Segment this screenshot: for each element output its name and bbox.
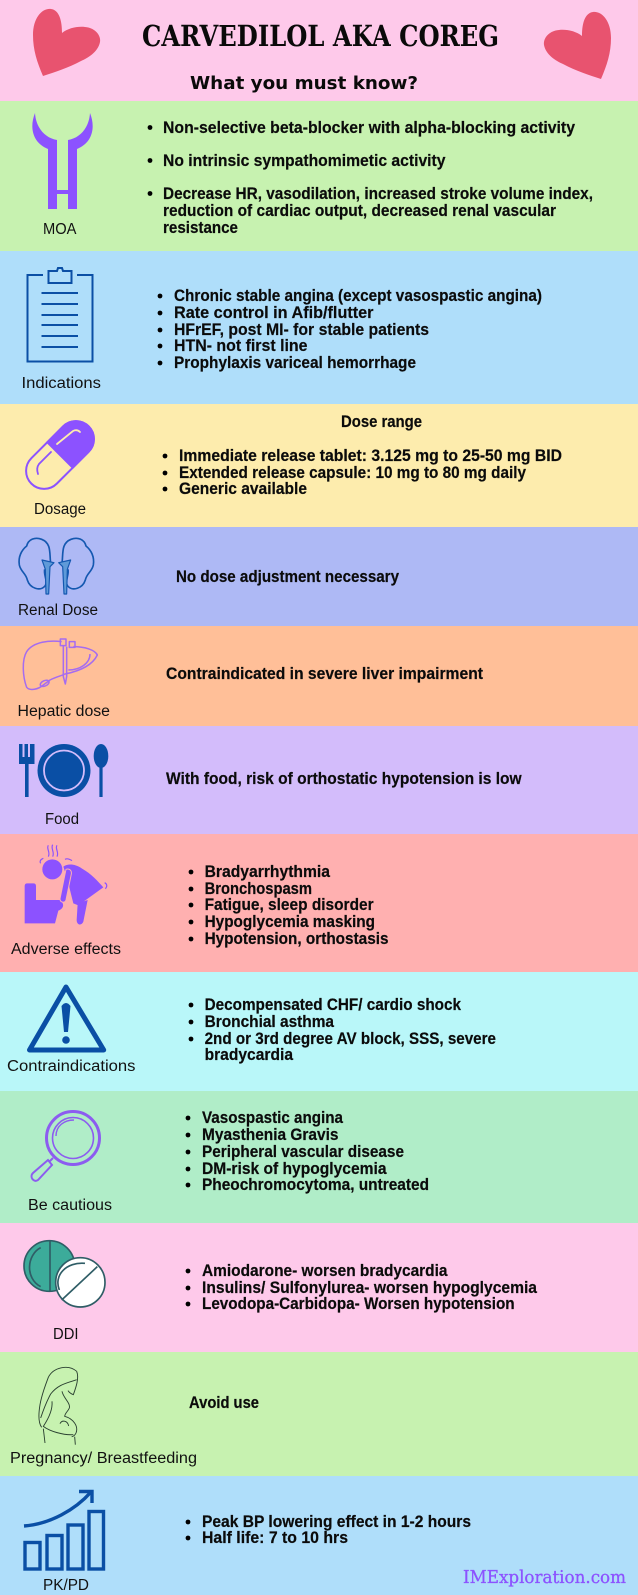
label: Indications: Indications bbox=[22, 375, 101, 392]
icon: pills bbox=[24, 1240, 105, 1307]
panel: renal dose background bbox=[0, 527, 638, 626]
subtitle: What you must know? bbox=[190, 73, 418, 94]
list: indications: HFrEF, post MI- for stable patients bbox=[174, 320, 429, 339]
label: Hepatic dose: Hepatic dose bbox=[18, 703, 110, 720]
list: mechanism of action bbox=[148, 118, 593, 237]
icon: warning triangle bbox=[30, 987, 104, 1050]
panel: dosage background bbox=[0, 404, 638, 527]
label: Dosage: Dosage bbox=[34, 501, 86, 518]
icon: liver bbox=[23, 639, 97, 689]
title: CARVEDILOL AKA COREG bbox=[142, 19, 499, 53]
list: mechanism of action: Decrease HR, vasodilation, increased stroke volume index, bbox=[163, 184, 593, 203]
list: pharmacokinetics bbox=[186, 1512, 471, 1547]
panel: hepatic dose background bbox=[0, 626, 638, 726]
panel: pregnancy background bbox=[0, 1352, 638, 1476]
icon: receptor bbox=[32, 113, 93, 209]
panel: contraindications background bbox=[0, 972, 638, 1091]
website credit: IMExploration.com bbox=[463, 1567, 626, 1588]
list: mechanism of action: resistance bbox=[163, 218, 238, 237]
label: Adverse effects: Adverse effects bbox=[11, 941, 121, 958]
text: pregnancy: Avoid use bbox=[189, 1393, 259, 1412]
icon: plate and cutlery bbox=[19, 744, 108, 797]
list: drug interactions bbox=[186, 1261, 537, 1313]
list: dose range bbox=[163, 446, 562, 498]
label: Pregnancy/ Breastfeeding: Pregnancy/ Breastfeeding bbox=[10, 1450, 197, 1467]
list: contraindications bbox=[189, 995, 496, 1064]
label: Renal Dose: Renal Dose bbox=[18, 602, 98, 619]
list: indications: Prophylaxis variceal hemorrhage bbox=[174, 353, 416, 372]
list: mechanism of action: No intrinsic sympathomimetic activity bbox=[163, 151, 446, 170]
label: Food: Food bbox=[45, 811, 79, 828]
list: adverse effects: Hypotension, orthostasis bbox=[205, 929, 388, 948]
list: adverse effects: Bradyarrhythmia bbox=[205, 862, 330, 881]
panel: header background bbox=[0, 0, 638, 101]
label: PK/PD: PK/PD bbox=[43, 1577, 89, 1594]
panel: food background bbox=[0, 726, 638, 834]
list: be cautious: Vasospastic angina bbox=[202, 1108, 343, 1127]
list: contraindications: Bronchial asthma bbox=[205, 1012, 334, 1031]
panel: be cautious background bbox=[0, 1091, 638, 1223]
list: contraindications: bradycardia bbox=[205, 1045, 293, 1064]
list: pharmacokinetics: Half life: 7 to 10 hrs bbox=[202, 1528, 348, 1547]
panel: indications background bbox=[0, 251, 638, 404]
list: contraindications: Decompensated CHF/ cardio shock bbox=[205, 995, 461, 1014]
panel: PK/PD background bbox=[0, 1476, 638, 1595]
panel: DDI background bbox=[0, 1223, 638, 1352]
list: drug interactions: Amiodarone- worsen bradycardia bbox=[202, 1261, 448, 1280]
text: renal dose: No dose adjustment necessary bbox=[176, 567, 399, 586]
list: drug interactions: Levodopa-Carbidopa- Worsen hypotension bbox=[202, 1294, 515, 1313]
list: dose range: Extended release capsule: 10 mg to 80 mg daily bbox=[179, 463, 526, 482]
icon: capsule bbox=[19, 414, 101, 496]
label: DDI: DDI bbox=[53, 1326, 78, 1343]
icon: kidneys bbox=[19, 538, 94, 594]
text: hepatic dose: Contraindicated in severe liver impairment bbox=[166, 664, 483, 683]
heading: dose range: Dose range bbox=[341, 412, 422, 431]
list: be cautious: Peripheral vascular disease bbox=[202, 1142, 404, 1161]
list: pharmacokinetics: Peak BP lowering effect in 1-2 hours bbox=[202, 1512, 471, 1531]
icon: pregnant woman bbox=[39, 1367, 78, 1445]
text: food: With food, risk of orthostatic hypotension is low bbox=[166, 769, 522, 788]
list: indications: Rate control in Afib/flutter bbox=[174, 303, 374, 322]
label: Be cautious: Be cautious bbox=[28, 1197, 112, 1214]
list: adverse effects: Fatigue, sleep disorder bbox=[205, 895, 374, 914]
list: adverse effects: Hypoglycemia masking bbox=[205, 912, 375, 931]
list: dose range: Generic available bbox=[179, 479, 307, 498]
list: be cautious: Myasthenia Gravis bbox=[202, 1125, 338, 1144]
icon: person vomiting bbox=[25, 845, 107, 925]
list: contraindications: 2nd or 3rd degree AV block, SSS, severe bbox=[205, 1029, 496, 1048]
list: indications: Chronic stable angina (except vasospastic angina) bbox=[174, 286, 542, 305]
list: be cautious bbox=[186, 1108, 429, 1194]
list: adverse effects: Bronchospasm bbox=[205, 879, 312, 898]
label: Contraindications: Contraindications bbox=[7, 1058, 136, 1075]
list: indications bbox=[158, 286, 542, 372]
list: be cautious: DM-risk of hypoglycemia bbox=[202, 1159, 387, 1178]
list: adverse effects bbox=[189, 862, 388, 948]
icon: magnifying glass bbox=[32, 1112, 100, 1181]
list: mechanism of action: Non-selective beta-blocker with alpha-blocking activity bbox=[163, 118, 575, 137]
panel: adverse effects background bbox=[0, 834, 638, 972]
list: indications: HTN- not first line bbox=[174, 336, 308, 355]
list: mechanism of action: reduction of cardiac output, decreased renal vascular bbox=[163, 201, 556, 220]
list: drug interactions: Insulins/ Sulfonylurea- worsen hypoglycemia bbox=[202, 1278, 537, 1297]
icon: right heart bbox=[544, 12, 611, 79]
panel: MOA background bbox=[0, 101, 638, 251]
list: be cautious: Pheochromocytoma, untreated bbox=[202, 1175, 429, 1194]
icon: rising bar chart bbox=[24, 1492, 104, 1569]
list: dose range: Immediate release tablet: 3.125 mg to 25-50 mg BID bbox=[179, 446, 562, 465]
label: MOA: MOA bbox=[43, 221, 77, 238]
icon: clipboard bbox=[28, 268, 92, 362]
icon: left heart bbox=[33, 9, 100, 76]
